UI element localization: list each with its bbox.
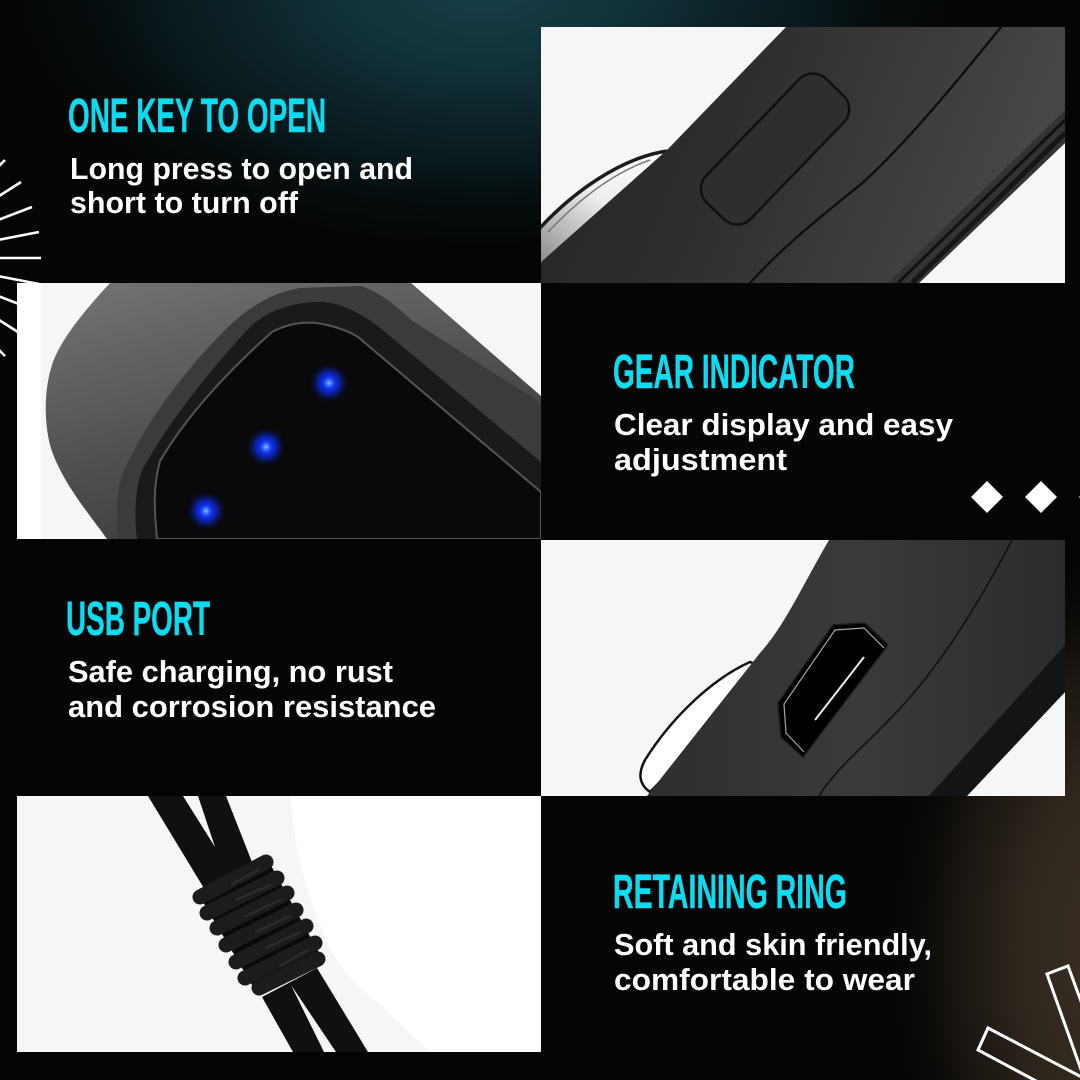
text: one key description: Long press to open and xyxy=(70,151,413,186)
heading: retaining ring: RETAINING RING xyxy=(613,866,847,919)
text: usb description: and corrosion resistance xyxy=(68,689,436,724)
LED 1 xyxy=(310,364,348,402)
seam line xyxy=(750,27,1001,283)
metal ring xyxy=(639,660,753,793)
text: gear description: Clear display and easy xyxy=(614,407,954,442)
cords xyxy=(148,796,368,1052)
body shell xyxy=(46,283,541,539)
panel: power button photo xyxy=(538,27,1065,283)
metal ring xyxy=(541,149,667,262)
seam line xyxy=(819,540,1012,796)
bezel xyxy=(117,286,541,539)
panel: USB port photo xyxy=(541,540,1065,796)
text: one key description: short to turn off xyxy=(70,185,299,220)
device body xyxy=(647,540,1065,796)
USB socket xyxy=(778,623,888,757)
text: ring description: Soft and skin friendly, xyxy=(614,927,932,962)
text: ring description xyxy=(614,927,932,997)
diamonds decoration xyxy=(971,481,1080,513)
LED 2 xyxy=(248,428,284,466)
inner groove xyxy=(135,302,541,539)
text: ring description: comfortable to wear xyxy=(614,962,915,997)
heading: gear indicator: GEAR INDICATOR xyxy=(613,346,855,399)
dark edge band xyxy=(929,645,1065,796)
LED 3 xyxy=(188,492,224,530)
text: one key description xyxy=(70,151,413,220)
coil xyxy=(200,860,322,990)
device body xyxy=(540,27,1065,283)
button xyxy=(700,72,850,226)
panel: indicator lights photo xyxy=(17,283,541,539)
text: gear description: adjustment xyxy=(614,442,787,477)
sunburst decoration left xyxy=(0,160,41,356)
text: usb description: Safe charging, no rust xyxy=(68,654,393,689)
screen with outline xyxy=(155,323,541,539)
outlined star decoration bottom right xyxy=(978,966,1080,1080)
dark edge band xyxy=(888,110,1065,283)
panel: retaining ring photo xyxy=(17,796,541,1052)
text: gear description xyxy=(614,407,954,477)
text: usb description xyxy=(68,654,436,724)
heading: one key to open: ONE KEY TO OPEN xyxy=(68,90,326,143)
heading: usb port: USB PORT xyxy=(66,593,210,646)
